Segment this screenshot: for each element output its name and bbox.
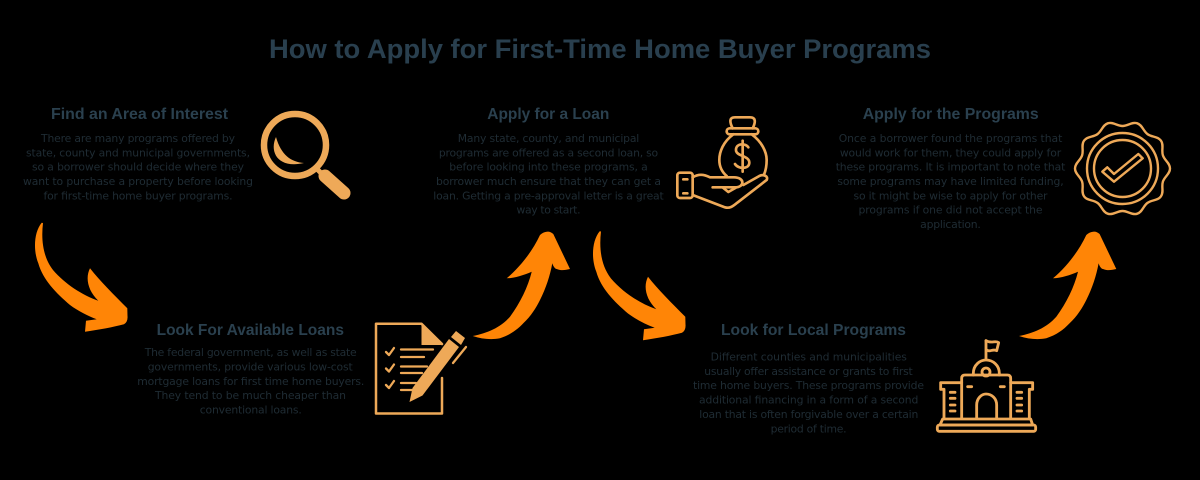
text block: apply for a loan: before looking into these programs, a <box>449 161 648 174</box>
text block: find an area of interest: for first-time home buyer programs. <box>44 189 232 202</box>
text block: apply for the programs: programs if one did not accept the <box>858 204 1043 217</box>
text block: look for available loans: They tend to be much cheaper than <box>154 389 346 402</box>
heading: apply for the programs: Apply for the Programs <box>863 106 1039 123</box>
text block: look for local programs: usually offer assistance or grants to first <box>704 365 913 378</box>
text block: look for available loans: mortgage loans for first time home buyers. <box>137 375 364 388</box>
text block: apply for a loan <box>433 132 664 217</box>
text block: apply for a loan: Many state, county, and municipal <box>458 132 639 145</box>
text block: find an area of interest: so a borrower should decide where they <box>32 161 245 174</box>
arrow: find area to available loans <box>35 223 128 332</box>
text block: apply for a loan: borrower much ensure that they can get a <box>436 175 661 188</box>
text block: look for local programs <box>693 350 924 436</box>
text block: apply for the programs: would work for them, they could apply for <box>840 146 1062 159</box>
text block: look for local programs: Different counties and municipalities <box>711 350 907 364</box>
text block: look for available loans: The federal government, as well as state <box>144 346 357 359</box>
title: How to Apply for First-Time Home Buyer Programs <box>269 34 931 64</box>
panel: apply for the programs <box>836 106 1065 231</box>
arrow: available loans to apply for a loan <box>473 232 570 339</box>
heading: look for available loans: Look For Available Loans <box>157 322 344 339</box>
icon: magnifying glass <box>264 114 344 193</box>
icon: approval badge <box>1075 123 1170 214</box>
text block: apply for the programs: application. <box>920 218 981 231</box>
text block: apply for a loan: loan. Getting a pre-approval letter is a great <box>433 189 664 202</box>
text block: find an area of interest: want to purchase a property before looking <box>23 175 253 188</box>
text block: look for available loans: governments, provide various low-cost <box>148 360 353 374</box>
text block: find an area of interest: There are many programs offered by <box>40 132 236 145</box>
text block: apply for a loan: programs are offered as a second loan, so <box>439 146 659 159</box>
icon: government building <box>937 341 1036 431</box>
text block: apply for the programs: these programs. It is important to note that <box>836 161 1065 174</box>
text block: apply for the programs: some programs may have limited funding, <box>837 175 1064 188</box>
text block: look for available loans <box>137 346 364 416</box>
panel: apply for a loan <box>433 106 664 217</box>
text block: apply for the programs <box>836 132 1065 231</box>
text block: look for local programs: time home buyers. These programs provide <box>693 379 924 392</box>
text block: look for local programs: period of time. <box>771 422 847 436</box>
arrow: apply for a loan to local programs <box>593 231 686 340</box>
text block: apply for the programs: Once a borrower found the programs that <box>839 132 1062 145</box>
text block: look for local programs: loan that is often forgivable over a certain <box>699 408 918 421</box>
heading: look for local programs: Look for Local Programs <box>721 322 906 339</box>
heading: find an area of interest: Find an Area of Interest <box>51 106 229 123</box>
text block: find an area of interest: state, county and municipal governments, <box>26 146 250 159</box>
text block: apply for the programs: so it might be wise to apply for other <box>854 189 1048 202</box>
icon: money bag in hand <box>677 117 767 208</box>
panel: look for available loans <box>137 322 364 416</box>
text block: apply for a loan: way to start. <box>516 204 580 217</box>
heading: apply for a loan: Apply for a Loan <box>487 106 609 123</box>
panel: look for local programs <box>693 322 924 436</box>
panel: find an area of interest <box>23 106 253 202</box>
text block: look for local programs: additional financing in a form of a second <box>699 394 918 406</box>
text block: find an area of interest <box>23 132 253 202</box>
text block: look for available loans: conventional loans. <box>200 404 302 416</box>
arrow: local programs to apply for the programs <box>1019 232 1116 339</box>
icon: checklist and pen <box>376 324 466 414</box>
